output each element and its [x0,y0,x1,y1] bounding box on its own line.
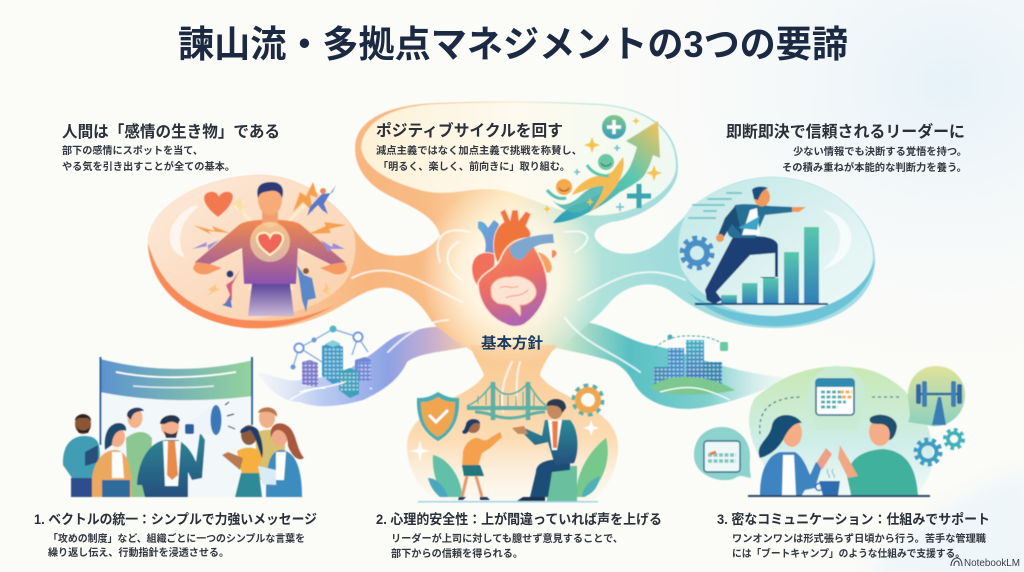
text block: point 3: 3. 密なコミュニケーション：仕組みでサポート [717,511,990,527]
text block: point 3: ワンオンワンは形式張らず日頃から行う。苦手な管理職 [732,532,987,545]
rays [225,205,315,290]
text block: human emotion: 人間は「感情の生き物」である [62,122,280,141]
text block: point 2 [376,511,662,560]
text block: point 3: には「ブートキャンプ」のような仕組みで支援する。 [732,547,965,560]
icon: gear [682,238,712,268]
flow: lower right branch [545,322,790,409]
figure: woman in yellow [222,425,263,497]
icon: bridge [467,382,547,420]
icon: gears [916,430,963,464]
text block: quick decision: その積み重ねが本能的な判断力を養う。 [782,161,967,174]
figure: central man [193,182,347,316]
text block: point 2: リーダーが上司に対しても臆せず意見することで、 [391,532,623,545]
highlight [170,205,198,258]
glow: centre light [420,180,604,364]
panel: right illustration, decisive leader [678,177,875,326]
figure: small woman [222,270,240,308]
text block: human emotion: やる気を引き出すことが全ての基本。 [62,160,235,173]
icon: plus sign [627,184,651,208]
icon: small plus signs [574,145,624,211]
text block: point 1 [34,512,317,559]
figure: woman [759,415,832,495]
text block: positive cycle: 「明るく、楽しく、前向きに」取り組む。 [378,160,570,173]
pulmonary artery [509,234,554,260]
text block: quick decision: 即断即決で信頼されるリーダーに [726,122,965,141]
flow: main body [148,101,875,369]
figure: man with tablet [63,414,100,497]
figure: seated leader [512,399,577,501]
icon: brain [491,276,536,316]
text block: point 1: 繰り返し伝え、行動指針を浸透させる。 [48,546,229,559]
figure: man behind right [255,407,285,480]
icon: shield [417,392,459,441]
panel: top bubble icons, positive cycle [543,115,662,223]
arrow: rising wave [547,121,660,223]
text block: quick decision [726,122,967,174]
bar chart [695,227,828,305]
text block: positive cycle [376,121,582,173]
panel: top bubble inner [361,102,676,215]
vena cava [478,220,499,256]
figure: girl [458,419,502,500]
left atrium [472,252,495,294]
sparkles [410,420,599,462]
base line [418,501,598,502]
figure: small person top right [307,185,336,216]
blob [678,177,873,316]
text block: point 1: 1. ベクトルの統一：シンプルで力強いメッセージ [34,512,317,527]
panel: psychological safety illustration [410,382,608,502]
highlight [822,210,851,270]
icon: lightning bolts [192,182,346,296]
figure: main speaker [137,415,205,497]
icon: smiley faces [556,154,614,195]
logo: NotebookLM: NotebookLM [964,557,1020,569]
foliage [428,438,608,497]
text block: human emotion: 部下の感情にスポットを当て、 [62,144,203,157]
title: 諫山流・多拠点マネジメントの3つの要諦 [178,24,848,65]
icon: plus circle [602,115,626,139]
table [748,495,930,497]
text block: point 2: 2. 心理的安全性：上が間違っていれば声を上げる [376,511,662,527]
panel: left illustration, emotions [148,175,355,328]
text block: quick decision: 少ない情報でも決断する覚悟を持つ。 [793,145,967,158]
seat [547,466,577,501]
figure: man [838,415,918,495]
label: basic policy: 基本方針 [481,334,543,352]
aorta [493,209,531,264]
banner [100,357,253,445]
text block: positive cycle: ポジティブサイクルを回す [376,121,563,140]
figure: woman with clipboard [258,423,304,497]
figure: man in green [126,408,152,497]
figure: running businessman [705,187,806,304]
text block: human emotion [62,122,280,173]
icon: floating heart [204,192,233,217]
green backdrop [749,366,933,497]
right atrium [527,252,552,273]
flow: white branch lines [352,230,685,412]
icon: glowing heart [257,233,283,255]
dashed connector [760,397,902,434]
figure: small man [297,265,316,312]
panel: team illustration with megaphone [63,357,304,497]
blob rim [148,243,335,328]
text block: point 2: 部下からの信頼を得られる。 [391,547,523,560]
flow: lower centre neck [407,345,618,502]
panel: city, lower right [650,334,735,400]
icon: stars [543,117,662,213]
text block: point 1: 「攻めの制度」など、組織ごとに一つのシンプルな言葉を [48,532,305,545]
text block: point 3 [717,511,990,560]
figure: woman in orange cardigan [92,423,132,497]
icon: bubble with calendar [807,366,866,431]
blob rim [688,258,875,326]
panel: communication illustration [694,366,965,497]
flow: lower left branch [257,326,478,406]
speed lines [689,193,741,218]
heart body [478,238,547,327]
icon: megaphone [185,402,235,435]
icon: coffee cup [816,469,840,496]
icon: bubble with dumbbell [908,366,965,426]
panel: buildings, lower left [290,326,372,400]
icon: bubble with calendar small [694,427,751,480]
text block: positive cycle: 減点主義ではなく加点主義で挑戦を称賛し、 [376,144,582,157]
icon: heart with brain [472,209,556,327]
glow behind team [100,385,253,497]
central flow diagram [148,101,875,502]
blob inner [148,175,355,320]
icon: gear [574,386,602,414]
